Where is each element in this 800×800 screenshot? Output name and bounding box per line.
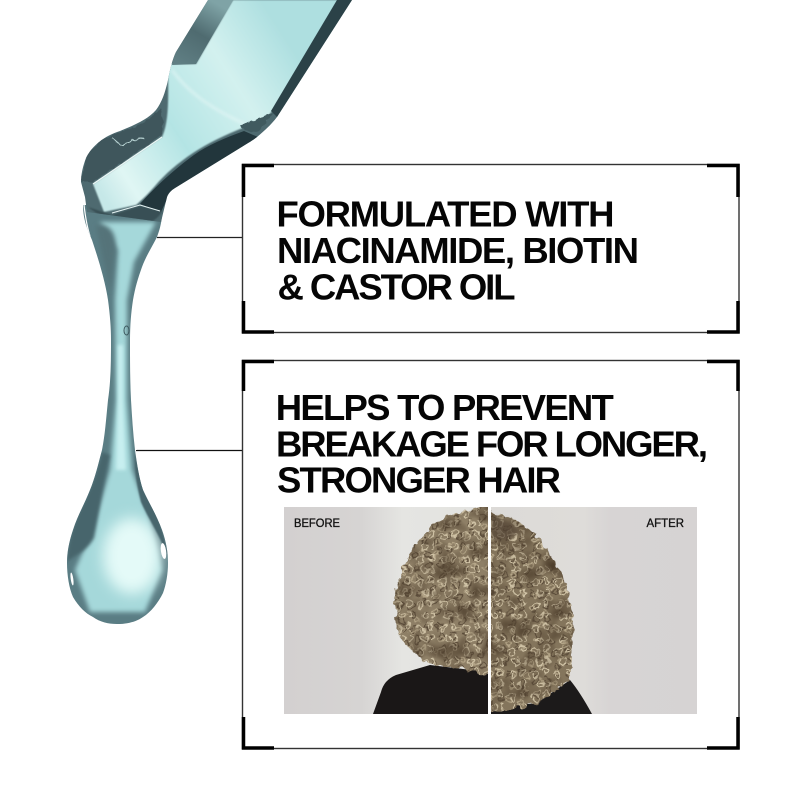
heading bbox=[276, 194, 639, 308]
highlight line: bulb bbox=[93, 137, 162, 184]
panel: ingredients callout bbox=[242, 164, 739, 332]
highlight: right of drop bbox=[160, 543, 167, 559]
corner brackets bbox=[244, 362, 738, 748]
label: before: BEFORE bbox=[294, 518, 340, 530]
panel frame bbox=[242, 164, 739, 332]
label: after: AFTER bbox=[646, 518, 684, 530]
heading bbox=[276, 387, 708, 500]
corner brackets bbox=[244, 166, 738, 332]
shirt bbox=[373, 665, 488, 714]
curly hair bbox=[395, 506, 492, 676]
highlight: left of drop bbox=[70, 572, 74, 586]
photo: after bbox=[486, 507, 697, 714]
connector line: bottom callout bbox=[136, 450, 243, 452]
dark glass: right tube edge bbox=[271, 0, 355, 118]
dropper tip band bbox=[90, 206, 162, 221]
air bubble bbox=[124, 326, 129, 335]
icon: glass dropper with serum drop bbox=[60, 0, 360, 630]
connector line: top callout bbox=[157, 236, 243, 238]
photo: before bbox=[284, 506, 492, 714]
panel frame bbox=[242, 360, 739, 748]
heading: FORMULATED WITH bbox=[276, 194, 614, 234]
shirt bbox=[491, 680, 592, 714]
heading: HELPS TO PREVENT bbox=[276, 387, 614, 428]
heading: & CASTOR OIL bbox=[278, 266, 516, 308]
panel: benefit callout with before and after photo bbox=[242, 360, 739, 748]
heading: STRONGER HAIR bbox=[277, 460, 561, 500]
heading: NIACINAMIDE, BIOTIN bbox=[277, 230, 639, 271]
dark hair crown bbox=[491, 517, 520, 541]
highlight: stem edge bbox=[133, 410, 136, 450]
dark glass: upper tube edge bbox=[172, 0, 233, 65]
dark glass: lower neck bbox=[140, 131, 258, 212]
drop of serum bbox=[67, 205, 168, 624]
dropper glass bbox=[75, 0, 360, 225]
glass rim reflection bbox=[240, 113, 273, 132]
divider bbox=[488, 507, 491, 714]
heading: BREAKAGE FOR LONGER, bbox=[276, 424, 708, 464]
dark glass: bulb top with reflections bbox=[81, 108, 163, 182]
soft edge of liquid level bbox=[172, 70, 245, 124]
serum in tube and neck bbox=[93, 0, 338, 212]
curly hair bbox=[486, 512, 573, 710]
bright caustic in bulb bbox=[112, 138, 144, 146]
